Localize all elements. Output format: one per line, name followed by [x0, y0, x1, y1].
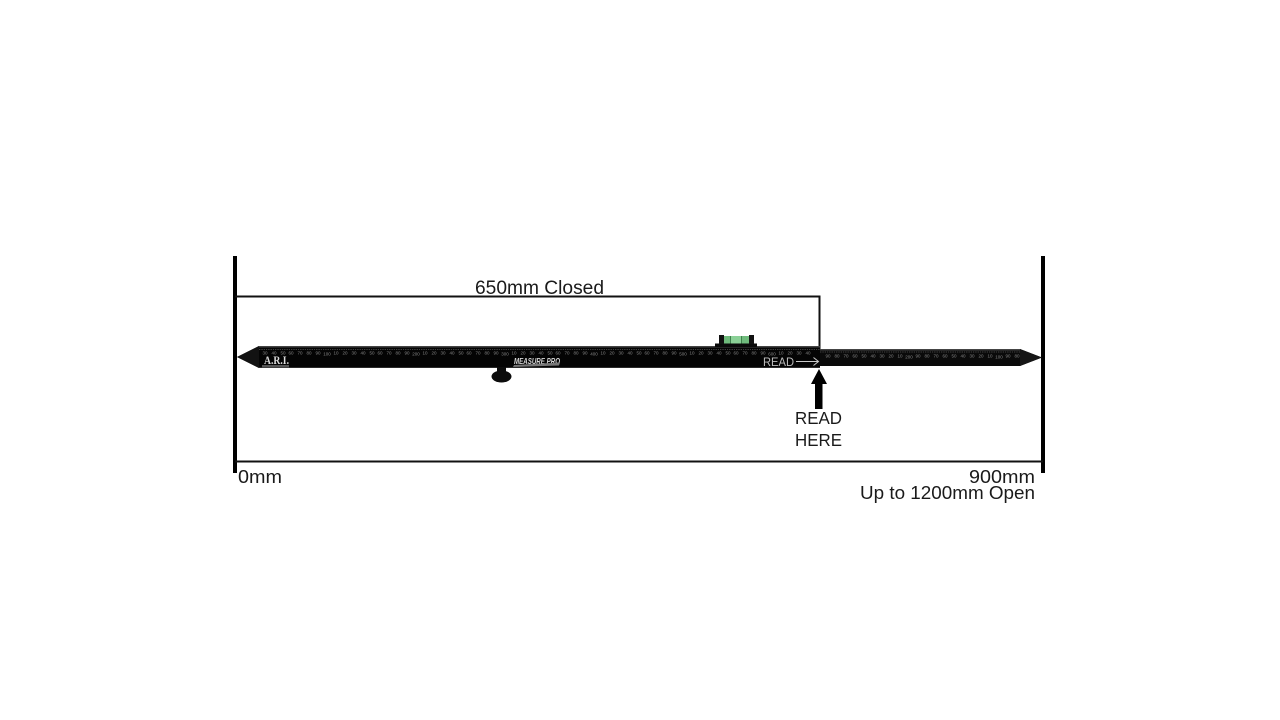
read pointer on stick: READ	[763, 357, 794, 369]
measuring stick: main body	[237, 346, 820, 368]
main scale numbers: 90	[493, 350, 499, 356]
label: 0mm: 0mm	[238, 466, 282, 487]
extension scale numbers: 200	[905, 354, 913, 360]
main scale numbers: 60	[555, 350, 561, 356]
arrow: read here	[811, 369, 827, 409]
main scale numbers: 50	[369, 350, 375, 356]
extension scale numbers	[825, 354, 1020, 360]
label: 900mm: 900mm	[969, 466, 1035, 487]
measuring stick: extension section	[820, 349, 1042, 366]
main scale numbers: 80	[484, 350, 490, 356]
main scale numbers: 80	[751, 350, 757, 356]
label: READ HERE	[795, 408, 842, 450]
extension scale numbers: 40	[960, 354, 966, 358]
main scale numbers: 10	[600, 350, 606, 356]
extension scale numbers: 10	[987, 354, 993, 358]
main scale numbers: 40	[271, 350, 277, 356]
logo: Measure Pro: MEASURE PRO	[514, 357, 561, 366]
main scale numbers: 500	[679, 352, 687, 356]
main scale numbers: 70	[653, 350, 659, 356]
main scale numbers: 200	[412, 352, 420, 356]
read pointer on stick	[763, 357, 818, 369]
extension scale numbers: 20	[978, 354, 984, 358]
main scale numbers: 60	[644, 350, 650, 356]
main scale numbers: 10	[511, 350, 517, 356]
extension scale numbers: 70	[843, 354, 849, 358]
main scale numbers	[262, 350, 811, 356]
icon: thumb screw	[492, 367, 512, 382]
main scale numbers: 80	[395, 350, 401, 356]
main scale numbers: 30	[796, 350, 802, 356]
label: 650mm Closed: 650mm Closed	[475, 278, 604, 299]
main scale numbers: 40	[538, 350, 544, 356]
main scale numbers: 80	[306, 350, 312, 356]
icon: spirit level	[715, 335, 757, 347]
main scale numbers: 100	[323, 352, 331, 356]
main scale numbers: 90	[582, 350, 588, 356]
main scale numbers: 40	[716, 350, 722, 356]
main scale numbers: 10	[333, 350, 339, 356]
main scale numbers: 90	[404, 350, 410, 356]
main scale numbers: 70	[742, 350, 748, 356]
label: READ HERE: READ	[795, 408, 842, 428]
left end bar: 0mm	[233, 256, 237, 473]
extension scale numbers: 100	[995, 354, 1003, 360]
main scale numbers: 300	[501, 352, 509, 356]
extension scale numbers: 50	[951, 354, 957, 358]
main scale numbers: 20	[698, 350, 704, 356]
main scale numbers: 80	[573, 350, 579, 356]
main scale numbers: 70	[297, 350, 303, 356]
main scale numbers: 50	[280, 350, 286, 356]
total span line	[235, 460, 1043, 462]
main scale numbers: 30	[440, 350, 446, 356]
main scale numbers: 50	[725, 350, 731, 356]
main scale numbers: 20	[609, 350, 615, 356]
main scale numbers: 40	[360, 350, 366, 356]
main scale numbers: 50	[547, 350, 553, 356]
main scale numbers: 600	[768, 352, 776, 356]
main scale numbers: 20	[520, 350, 526, 356]
extension scale numbers: 60	[852, 354, 858, 358]
main scale numbers: 60	[288, 350, 294, 356]
main scale numbers: 30	[262, 350, 268, 356]
extension scale numbers: 80	[1014, 354, 1020, 358]
main scale numbers: 20	[342, 350, 348, 356]
main scale numbers: 70	[564, 350, 570, 356]
main scale numbers: 400	[590, 352, 598, 356]
main scale numbers: 90	[671, 350, 677, 356]
main scale numbers: 40	[449, 350, 455, 356]
main scale numbers: 20	[431, 350, 437, 356]
main scale numbers: 20	[787, 350, 793, 356]
label: up to 1200mm open: Up to 1200mm Open	[860, 482, 1035, 503]
extension scale numbers: 30	[969, 354, 975, 358]
extension scale numbers: 80	[924, 354, 930, 358]
main scale numbers: 10	[422, 350, 428, 356]
extension scale numbers: 30	[879, 354, 885, 358]
main scale numbers: 40	[627, 350, 633, 356]
extension scale numbers: 20	[888, 354, 894, 358]
main scale numbers: 70	[386, 350, 392, 356]
main scale numbers: 60	[377, 350, 383, 356]
main scale numbers: 50	[458, 350, 464, 356]
extension scale numbers: 80	[834, 354, 840, 358]
extension scale numbers: 90	[1005, 354, 1011, 358]
main scale numbers: 50	[636, 350, 642, 356]
extension scale numbers: 70	[933, 354, 939, 358]
label: READ HERE: HERE	[795, 430, 842, 450]
main scale numbers: 80	[662, 350, 668, 356]
main scale numbers: 70	[475, 350, 481, 356]
main scale numbers: 60	[466, 350, 472, 356]
right end bar: 900mm	[1041, 256, 1045, 473]
extension scale numbers: 10	[897, 354, 903, 358]
extension scale numbers: 90	[825, 354, 831, 358]
main scale numbers: 30	[529, 350, 535, 356]
main scale numbers: 60	[733, 350, 739, 356]
main scale numbers: 30	[351, 350, 357, 356]
closed length bracket	[235, 296, 820, 350]
extension scale numbers: 40	[870, 354, 876, 358]
main scale numbers: 40	[805, 350, 811, 356]
main scale numbers: 10	[689, 350, 695, 356]
extension scale numbers: 90	[915, 354, 921, 358]
extension scale numbers: 60	[942, 354, 948, 358]
main scale numbers: 30	[707, 350, 713, 356]
main scale numbers: 90	[760, 350, 766, 356]
extension scale numbers: 50	[861, 354, 867, 358]
main scale numbers: 90	[315, 350, 321, 356]
logo: A.R.I.: A.R.I.	[264, 355, 289, 367]
main scale numbers: 30	[618, 350, 624, 356]
main scale numbers: 10	[778, 350, 784, 356]
